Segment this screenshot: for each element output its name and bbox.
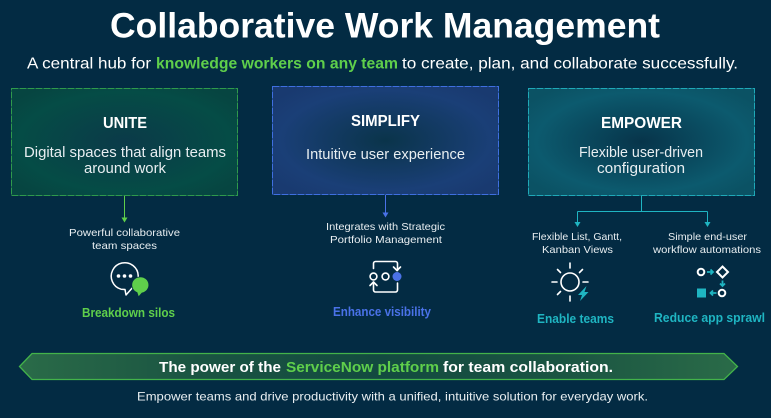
unite description: around work bbox=[84, 161, 167, 177]
title: Collaborative Work Management bbox=[110, 6, 660, 46]
banner text: The power of the bbox=[159, 359, 281, 376]
automations detail text: workflow automations bbox=[652, 244, 761, 256]
unite detail text: Powerful collaborative bbox=[69, 227, 180, 239]
enable teams outcome: Enable teams bbox=[537, 312, 614, 326]
subtitle: knowledge workers on any team bbox=[156, 56, 398, 72]
panel: unite bbox=[12, 88, 238, 320]
empower box bbox=[528, 88, 754, 196]
simplify detail text: Integrates with Strategic bbox=[326, 221, 445, 233]
unite description bbox=[24, 145, 226, 177]
empower description: Flexible user-driven bbox=[579, 145, 703, 161]
icon: portfolio cycle bbox=[370, 262, 402, 292]
subtitle: to create, plan, and collaborate successfully. bbox=[402, 56, 738, 72]
automations detail text bbox=[652, 231, 761, 256]
banner shape bbox=[20, 354, 738, 380]
banner text: for team collaboration. bbox=[443, 359, 613, 376]
subtitle bbox=[27, 56, 738, 72]
empower description: configuration bbox=[597, 161, 685, 177]
unite box bbox=[12, 88, 238, 196]
views detail text: Flexible List, Gantt, bbox=[532, 231, 622, 243]
reduce sprawl outcome: Reduce app sprawl bbox=[654, 311, 765, 325]
arrow: unite down bbox=[122, 196, 128, 222]
views detail text bbox=[532, 231, 622, 256]
unite outcome: Breakdown silos bbox=[82, 306, 175, 320]
banner bbox=[20, 354, 738, 380]
banner text: ServiceNow platform bbox=[286, 359, 439, 376]
subtitle: A central hub for bbox=[27, 56, 152, 72]
empower description bbox=[579, 145, 703, 177]
banner text bbox=[159, 359, 613, 376]
empower heading: EMPOWER bbox=[601, 115, 682, 132]
views detail text: Kanban Views bbox=[542, 244, 613, 256]
unite heading: UNITE bbox=[103, 115, 147, 132]
unite description: Digital spaces that align teams bbox=[24, 145, 226, 161]
simplify detail text: Portfolio Management bbox=[330, 234, 442, 246]
arrow: simplify down bbox=[382, 195, 388, 218]
automations detail text: Simple end-user bbox=[668, 231, 748, 243]
icon: chat bubbles bbox=[111, 263, 149, 297]
panel: simplify bbox=[272, 86, 498, 319]
simplify detail text bbox=[326, 221, 445, 246]
unite detail text: team spaces bbox=[92, 240, 157, 252]
simplify heading: SIMPLIFY bbox=[351, 113, 420, 130]
arrow: empower branching bbox=[574, 196, 710, 227]
unite detail text bbox=[69, 227, 180, 252]
footer text: Empower teams and drive productivity with a unified, intuitive solution for everyday work. bbox=[137, 390, 648, 404]
simplify description: Intuitive user experience bbox=[306, 147, 465, 163]
simplify box bbox=[272, 86, 498, 194]
simplify outcome: Enhance visibility bbox=[333, 305, 431, 319]
panel: empower bbox=[528, 88, 765, 326]
icon: workflow bbox=[697, 266, 728, 298]
icon: sun with bolt bbox=[552, 263, 588, 301]
